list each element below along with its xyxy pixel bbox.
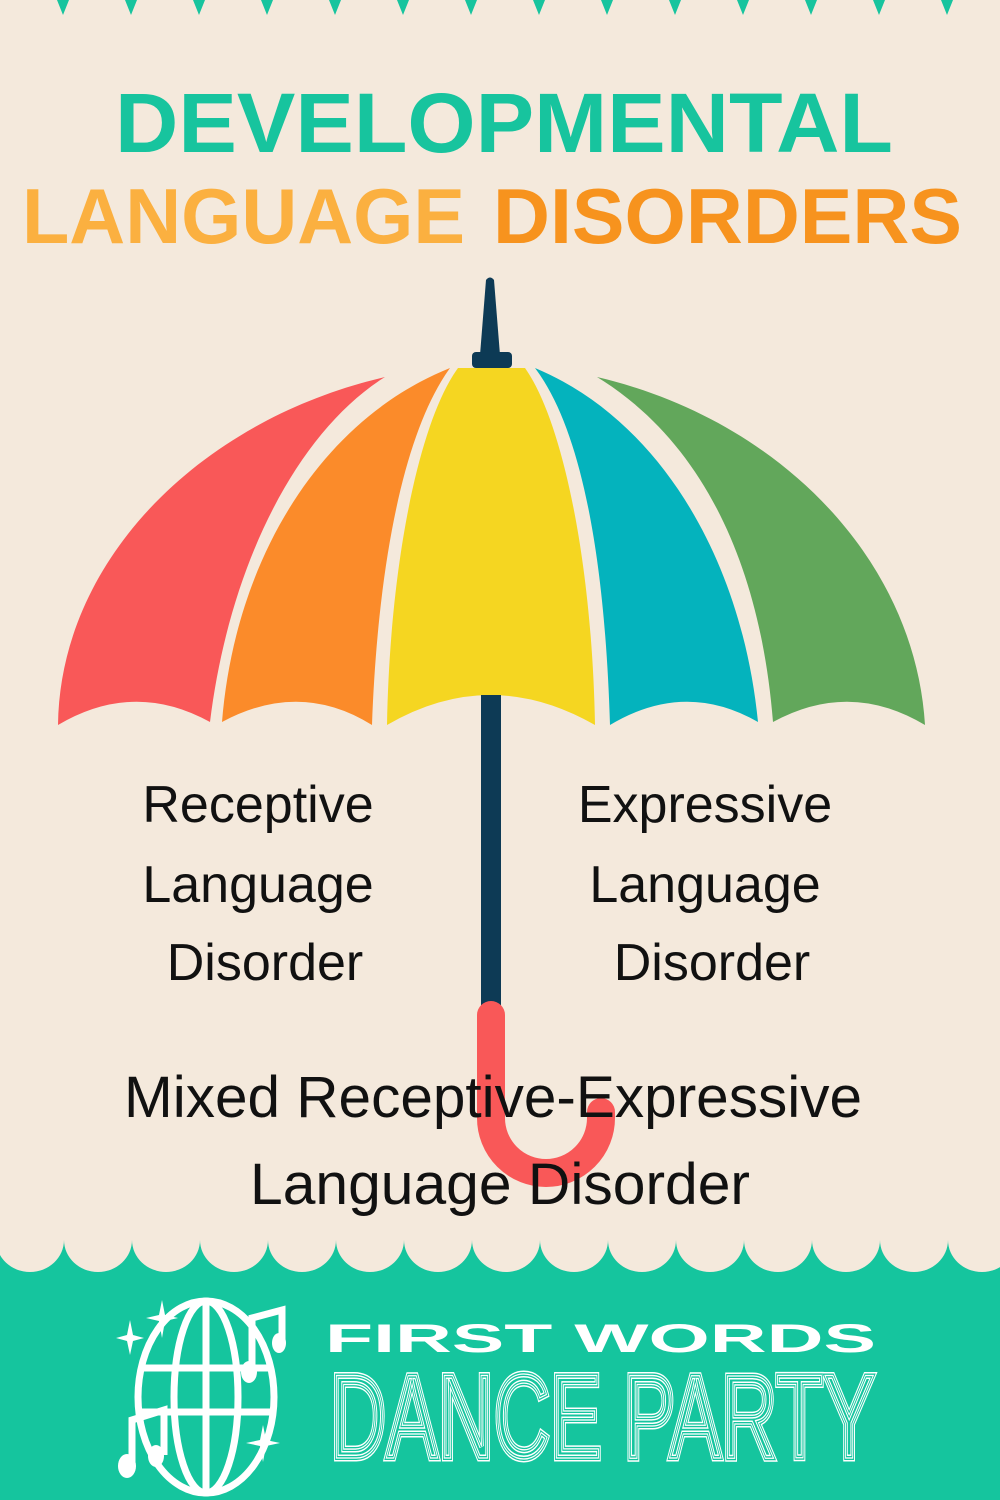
title: DEVELOPMENTAL (115, 76, 893, 170)
bottom label: Mixed Receptive-Expressive (124, 1065, 862, 1130)
title: DISORDERS (493, 172, 962, 260)
logo icon: disco globe with notes (116, 1300, 286, 1493)
left label: Receptive (142, 776, 374, 834)
bottom label: Language Disorder (250, 1152, 750, 1217)
top spike border (57, 0, 953, 15)
right label: Disorder (614, 934, 810, 992)
footer band (0, 1240, 1000, 1500)
left label (142, 776, 374, 992)
logo text: FIRST WORDS (325, 1317, 876, 1361)
title (22, 76, 962, 260)
right label: Language (589, 856, 821, 914)
right label (578, 776, 832, 992)
bottom label (124, 1065, 862, 1217)
left label: Disorder (167, 934, 363, 992)
right label: Expressive (578, 776, 832, 834)
umbrella (58, 278, 925, 1173)
left label: Language (142, 856, 374, 914)
logo text (325, 1317, 876, 1484)
title: LANGUAGE (22, 172, 465, 260)
